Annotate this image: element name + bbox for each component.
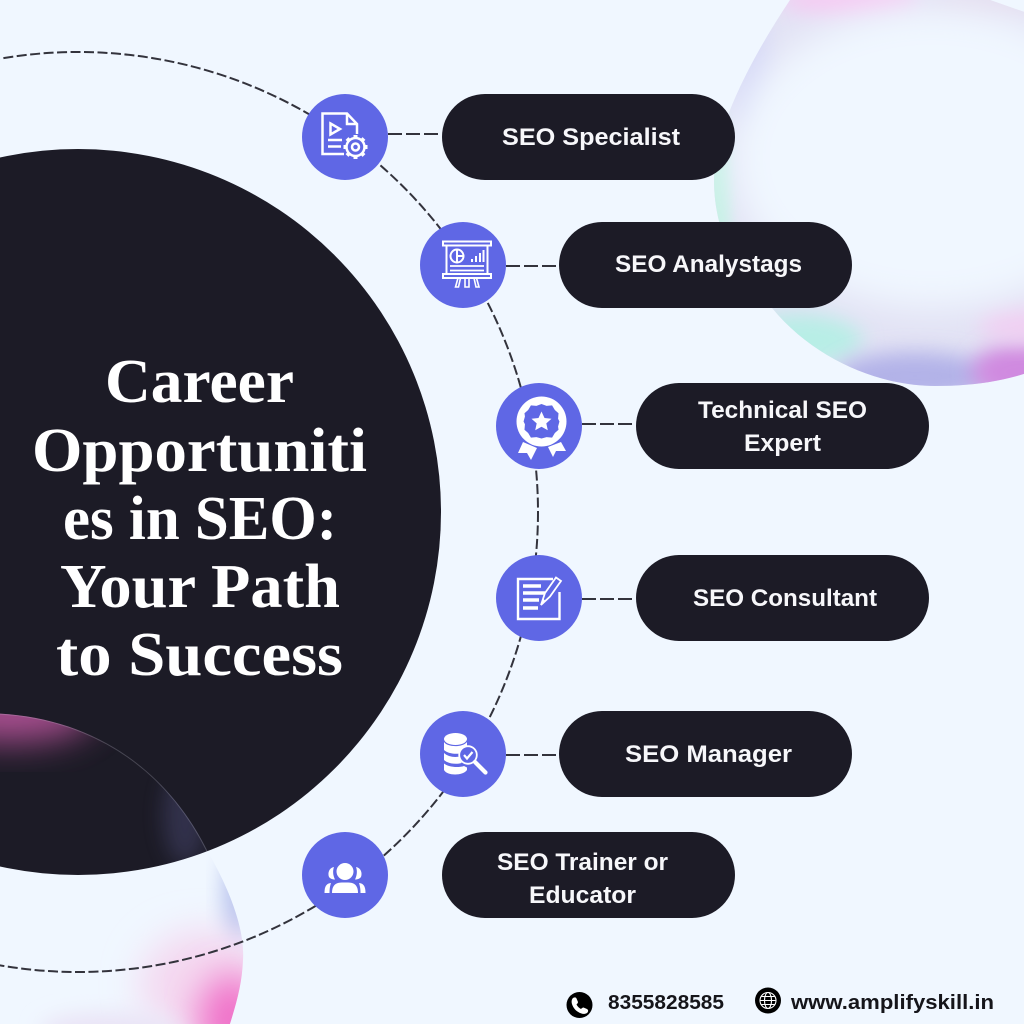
icon: globe <box>755 988 781 1014</box>
pill: SEO Specialist: SEO Specialist <box>502 124 680 151</box>
bubble overlay on dark circle <box>0 714 208 862</box>
pill: Technical SEO Expert: Expert <box>744 430 821 457</box>
pill: SEO Specialist <box>442 94 735 180</box>
step 4 <box>496 555 929 641</box>
title: Your Path <box>60 553 340 621</box>
pill: SEO Analystags: SEO Analystags <box>615 251 802 278</box>
pill: SEO Manager <box>559 711 852 797</box>
pill: SEO Trainer or Educator <box>442 832 735 918</box>
title: Opportuniti <box>32 417 367 485</box>
icon: presentation board <box>420 222 506 308</box>
pill: Technical SEO Expert <box>636 383 929 469</box>
icon: database with magnifier <box>420 711 506 797</box>
pill: SEO Manager: SEO Manager <box>625 741 792 768</box>
icon: award medal <box>496 383 582 469</box>
website: www.amplifyskill.in <box>790 992 994 1014</box>
step 3 <box>496 383 929 469</box>
title: es in SEO: <box>63 485 337 553</box>
pill: SEO Analystags <box>559 222 852 308</box>
contact footer <box>566 988 994 1018</box>
title <box>32 348 367 689</box>
decorative bubble top right <box>700 0 1024 402</box>
dark circle panel <box>0 149 441 875</box>
step 6 <box>302 832 735 918</box>
pill: SEO Trainer or Educator: Educator <box>529 882 636 909</box>
icon: document with gear <box>302 94 388 180</box>
step 2 <box>420 222 852 308</box>
step 1 <box>302 94 735 180</box>
pill: SEO Consultant <box>636 555 929 641</box>
title: to Success <box>56 621 343 689</box>
pill: SEO Consultant: SEO Consultant <box>693 585 877 612</box>
icon: group of people <box>302 832 388 918</box>
phone number: 8355828585 <box>608 992 724 1014</box>
icon: notepad with pencil <box>496 555 582 641</box>
title: Career <box>105 348 294 416</box>
icon: phone <box>566 992 592 1018</box>
pill: Technical SEO Expert: Technical SEO <box>698 397 867 424</box>
step 5 <box>420 711 852 797</box>
dashed path <box>0 52 636 972</box>
decorative bubble bottom left, part on light background <box>49 866 244 1024</box>
pill: SEO Trainer or Educator: SEO Trainer or <box>497 849 668 876</box>
